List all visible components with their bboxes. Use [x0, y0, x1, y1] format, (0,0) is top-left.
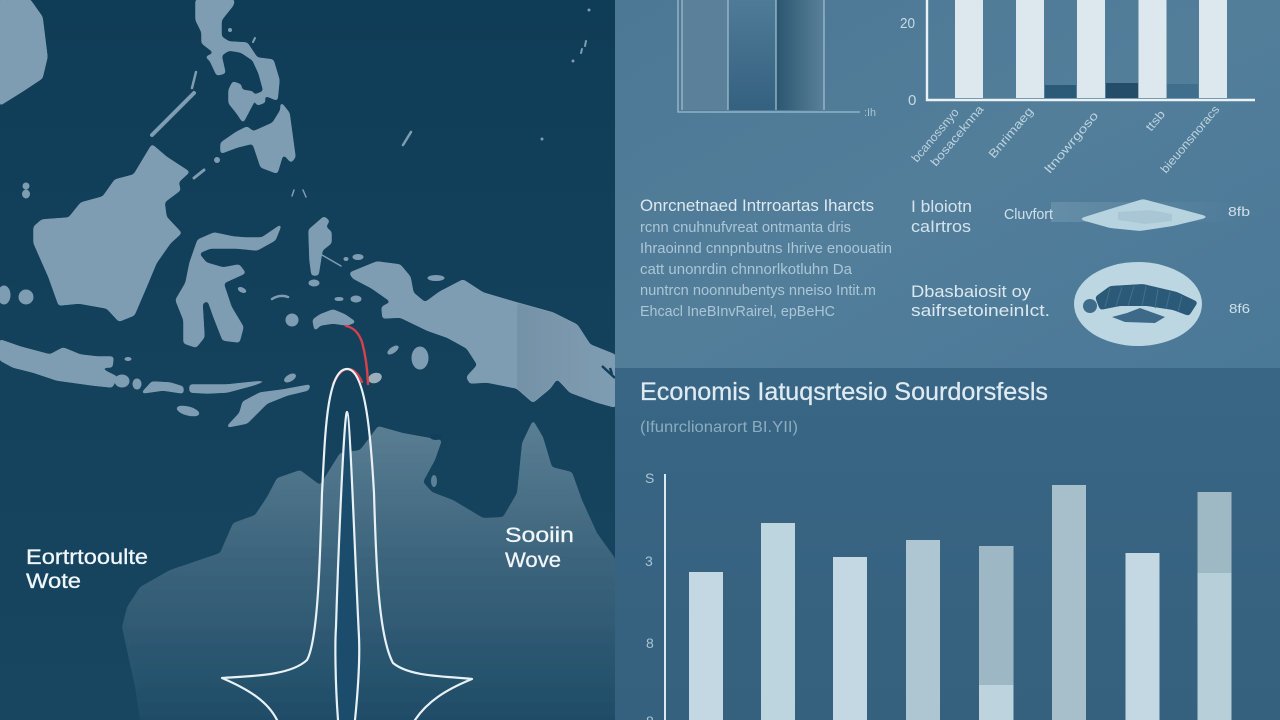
- land: New Guinea: [350, 262, 615, 407]
- red fault line: [333, 326, 368, 384]
- land: Halmahera: [309, 217, 331, 275]
- heading: Economis Iatuqsrtesio Sourdorsfesls: [640, 378, 1048, 406]
- text: first item heading: [911, 197, 972, 236]
- land: Luzon: [196, 0, 279, 100]
- small islands: [0, 9, 590, 418]
- text block: description: catt unonrdin chnnorlkotluhn Da: [640, 261, 853, 278]
- land: Borneo: [34, 145, 189, 321]
- land: Leyte: [255, 92, 265, 105]
- chart: white bars: ltnowrgoso: [1042, 108, 1101, 176]
- chart: shaded columns: [678, 0, 876, 119]
- chart: white bars: ttsb: [1143, 107, 1168, 134]
- chart: white bars: 20: [900, 15, 915, 32]
- land: Flores: [190, 381, 265, 393]
- chart: white bars: 0: [908, 92, 916, 109]
- chart: white bars: bieuonsnoracs: [1158, 103, 1222, 176]
- land: Mindanao: [221, 103, 295, 173]
- chart: white bars: [900, 0, 1255, 176]
- land: Timor: [227, 385, 310, 427]
- text block: description: Onrcnetnaed Intrroartas Iharcts: [640, 196, 874, 215]
- map landmasses: [0, 0, 615, 427]
- text block: description: Ihraoinnd cnnpnbutns Ihrive enoouatin: [640, 240, 892, 257]
- chart: white bars: Bnrimaeg: [986, 104, 1036, 161]
- bar chart: 8: [646, 635, 654, 651]
- item: lens-shaped cloud icon with label and value: 8fb: [1228, 204, 1250, 219]
- land: Sulawesi: [176, 225, 281, 347]
- land: Visayas: [229, 82, 253, 122]
- Gulf islands off northern coast: [430, 434, 442, 487]
- text: second item heading: Dbasbaiosit oy: [911, 282, 1032, 301]
- text block: description: rcnn cnuhnufvreat ontmanta dris: [640, 219, 851, 236]
- item: lens-shaped cloud icon with label and value: Cluvfort: [1004, 206, 1054, 223]
- chart: white bars: bosaceknna: [928, 102, 987, 169]
- subheading: (Ifunrclionarort BI.YII): [640, 419, 798, 436]
- bar chart: [645, 470, 1232, 720]
- text: second item heading: [911, 282, 1050, 320]
- land: Australia: [122, 420, 617, 720]
- bar chart: 3: [645, 553, 653, 569]
- label: left wave: [26, 546, 148, 593]
- text block: description: Ehcacl IneBInvRairel, epBeHC: [640, 303, 835, 320]
- panel: map of the region: [0, 0, 617, 720]
- land: Seram: [313, 310, 355, 330]
- New Guinea shaded half: [517, 303, 615, 407]
- text: second item heading: saifrsetoineinIct.: [911, 301, 1050, 320]
- text: first item heading: caIrtros: [911, 217, 971, 236]
- island chains: [152, 38, 586, 299]
- panel: economic impact: [615, 368, 1280, 720]
- label: right wave: [505, 524, 574, 572]
- item: oval disc icon with value: 8f6: [1229, 301, 1250, 316]
- chart: shaded columns: :Ih: [864, 107, 876, 119]
- label: left wave: Wote: [26, 570, 81, 593]
- land: Sumbawa: [142, 382, 183, 393]
- land: Malay peninsula: [0, 0, 47, 105]
- label: right wave: Sooiin: [505, 524, 574, 547]
- land: Java: [0, 340, 117, 387]
- panel: upper right: [615, 0, 1280, 368]
- seismic wave outline: [222, 369, 472, 720]
- land: island beside the red line: [367, 371, 383, 385]
- item: lens-shaped cloud icon with label and value: [1004, 199, 1250, 231]
- chart: white bars: bcanossnyo: [909, 105, 962, 165]
- text block: description: [640, 196, 892, 320]
- bar chart: S: [645, 470, 654, 486]
- item: oval disc icon with value: [1074, 262, 1250, 346]
- label: right wave: Wove: [505, 549, 561, 572]
- label: left wave: Eortrtooulte: [26, 546, 148, 569]
- text block: description: nuntrcn noonnubentys nneiso Intit.m: [640, 282, 876, 299]
- text: first item heading: I bloiotn: [911, 197, 972, 216]
- inlet: [602, 366, 615, 378]
